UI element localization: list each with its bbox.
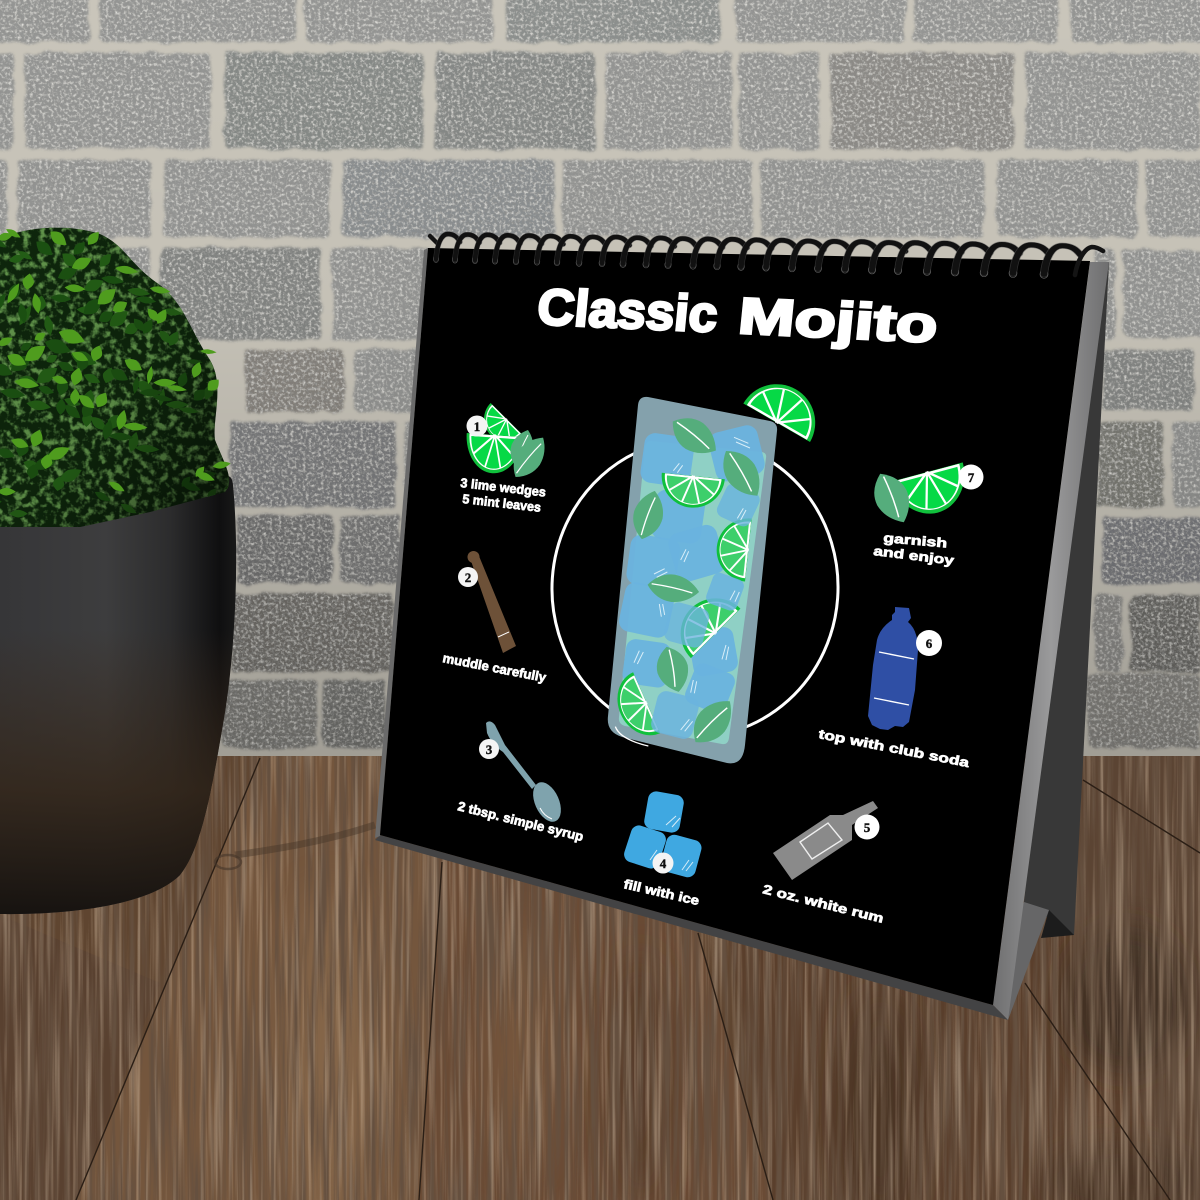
base strip xyxy=(375,835,1008,1020)
icon: lime wedges and mint xyxy=(464,403,554,484)
title: Classic xyxy=(535,278,720,343)
label 1: 3 lime wedges xyxy=(460,475,547,500)
icon: soda bottle xyxy=(868,607,918,730)
glass highlight xyxy=(615,727,648,746)
brick wall background xyxy=(0,0,1200,760)
icon: ice cubes xyxy=(622,790,703,879)
label 7 xyxy=(873,530,956,568)
drink xyxy=(619,441,766,744)
label 1 xyxy=(460,475,547,515)
badge 5: 5 xyxy=(864,820,871,835)
glass body xyxy=(608,397,777,763)
back panel xyxy=(1024,262,1109,935)
badge 1: 1 xyxy=(474,419,480,434)
icon: spoon xyxy=(486,721,567,826)
title xyxy=(535,278,940,353)
icon: bottle xyxy=(773,801,878,880)
step 7: garnish xyxy=(865,462,984,568)
label 5: 2 oz. white rum xyxy=(761,881,885,926)
foot xyxy=(990,902,1049,1020)
label 6: top with club soda xyxy=(817,726,971,770)
calendar page xyxy=(380,248,1090,1005)
step 3: spoon xyxy=(456,721,585,844)
title: Mojito xyxy=(736,287,940,353)
step 6: soda bottle xyxy=(817,607,971,770)
badge 6 xyxy=(916,630,942,656)
badge 2: 2 xyxy=(465,570,471,585)
badge 3: 3 xyxy=(486,742,493,757)
badge 7: 7 xyxy=(968,470,975,485)
label 7: garnish xyxy=(883,530,948,551)
label 7: and enjoy xyxy=(873,543,956,568)
label 2: muddle carefully xyxy=(441,650,548,685)
highball glass xyxy=(607,397,777,763)
icon: lime wedge and mint xyxy=(865,462,974,530)
wooden floor xyxy=(0,756,1200,1200)
calendar stand xyxy=(375,248,1109,1020)
label 3: 2 tbsp. simple syrup xyxy=(456,798,585,844)
white circle behind glass xyxy=(542,429,848,747)
step 1: limes and mint xyxy=(460,403,554,515)
side edge xyxy=(993,262,1109,1020)
spiral binding xyxy=(430,234,1103,278)
icon: muddler xyxy=(468,551,516,653)
label 1: 5 mint leaves xyxy=(462,491,542,515)
badge 6: 6 xyxy=(926,636,933,651)
plant pot xyxy=(0,476,236,914)
foot shadow xyxy=(1041,910,1074,938)
ice, lime and mint contents xyxy=(607,409,770,752)
garnish lime wedge xyxy=(743,370,829,442)
step 4: ice xyxy=(622,790,703,908)
left edge xyxy=(375,248,428,838)
step 5: rum bottle xyxy=(761,801,885,926)
plant foliage xyxy=(0,220,243,530)
step 2: muddler xyxy=(441,551,548,685)
badge 4: 4 xyxy=(660,856,667,871)
label 4: fill with ice xyxy=(622,876,701,908)
ice highlights xyxy=(634,437,750,731)
